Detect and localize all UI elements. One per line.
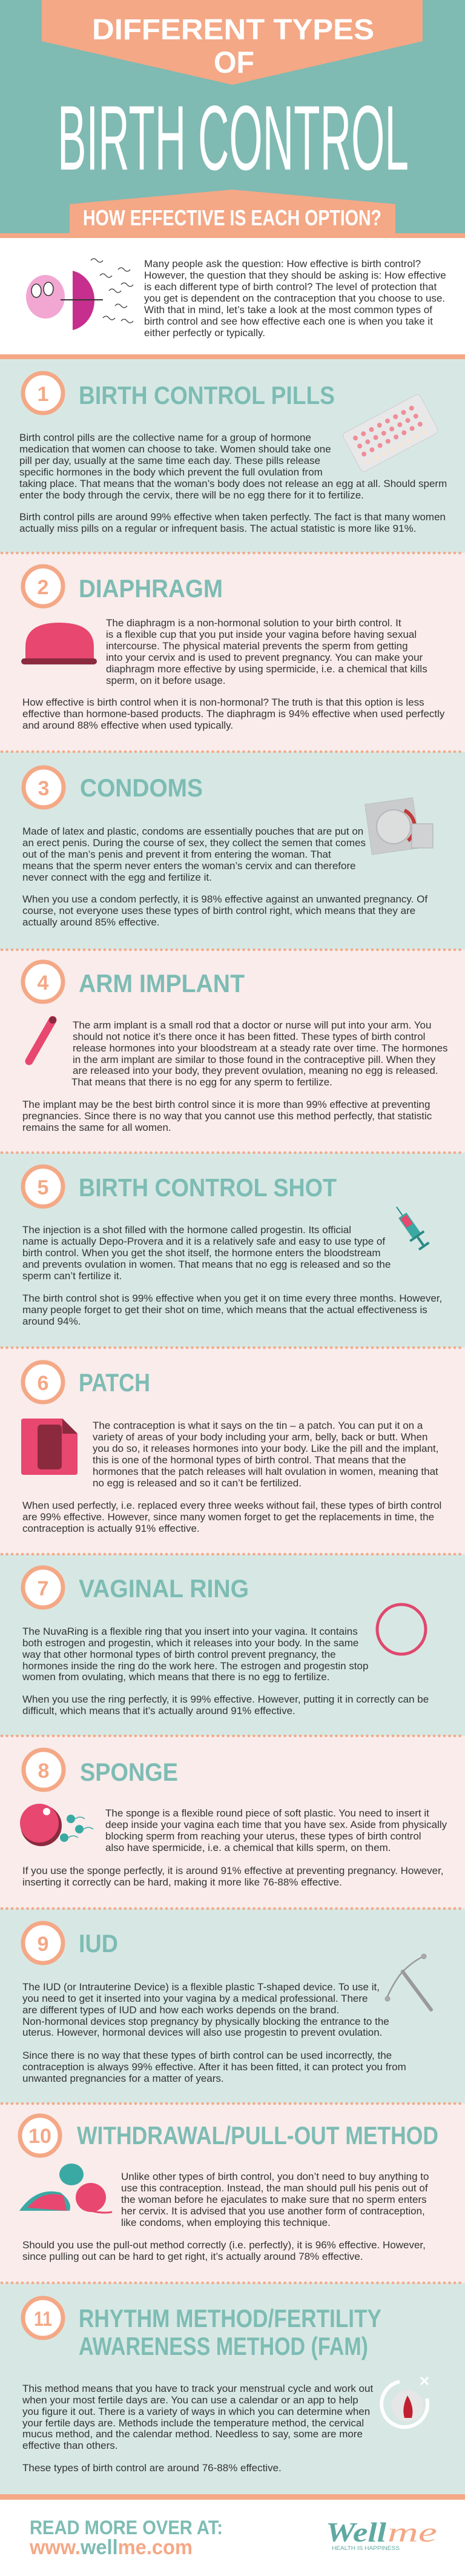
text: The contraception is what it says on the tin – a patch. You can put it on a <box>93 1420 423 1431</box>
text: contraception is actually 91% effective. <box>22 1523 200 1534</box>
text: sperm, on it before usage. <box>106 675 226 686</box>
panel 9: IUD <box>0 1909 465 2104</box>
text: name is actually Depo-Provera and it is a relatively safe and easy to use type of <box>22 1236 385 1247</box>
text: use this contraception. Instead, the man should pull his penis out of <box>121 2182 428 2194</box>
text: you do so, it releases hormones into your body. Like the pill and the implant, <box>93 1443 438 1454</box>
panel 5: birth control shot <box>0 1153 465 1348</box>
icon: ring <box>377 1604 426 1654</box>
number badge 1 <box>23 373 63 413</box>
number badge 5: 5 <box>38 1176 48 1199</box>
text: release hormones into your bloodstream at a steady rate over time. The hormones <box>73 1042 448 1054</box>
intro text: either perfectly or typically. <box>144 327 265 339</box>
icon: pill pack <box>342 393 439 473</box>
text: When you use the ring perfectly, it is 99% effective. However, putting it in correctly can be <box>22 1694 429 1705</box>
text: diaphragm more effective by using spermicide, i.e. a chemical that kills <box>106 663 427 675</box>
number badge 7 <box>23 1568 63 1608</box>
panel 1: birth control pills <box>0 359 465 553</box>
number badge 4 <box>23 962 63 1002</box>
intro text: With that in mind, let’s take a look at the most common types of <box>144 304 432 316</box>
text: birth control. When you get the shot itself, the hormone enters the bloodstream <box>22 1247 381 1259</box>
text: difficult, which means that it’s actually around 91% effective. <box>22 1705 295 1717</box>
text: sperm can’t fertilize it. <box>22 1270 122 1282</box>
text: These types of birth control are around 76-88% effective. <box>22 2462 282 2474</box>
text: Birth control pills are around 99% effective when taken perfectly. The fact is that many women <box>19 511 446 523</box>
text <box>22 1420 441 1534</box>
heading: RHYTHM METHOD/FERTILITY <box>79 2304 381 2333</box>
text: Made of latex and plastic, condoms are essentially pouches that are put on <box>22 826 363 837</box>
text: means that the sperm never enters the woman’s cervix and can therefore <box>22 860 356 872</box>
text: The arm implant is a small rod that a doctor or nurse will put into your arm. You <box>73 1019 431 1031</box>
text: The NuvaRing is a flexible ring that you insert into your vagina. It contains <box>22 1626 358 1637</box>
number badge 2: 2 <box>38 576 48 599</box>
text: no egg is released and so it can’t be fertilized. <box>93 1477 302 1489</box>
text <box>22 617 445 731</box>
text: around 94%. <box>22 1316 81 1327</box>
text: effective than hormone-based products. The diaphragm is 94% effective when used perfectly <box>22 708 445 720</box>
text: This method means that you have to track your menstrual cycle and work out <box>22 2383 373 2394</box>
number badge 9 <box>23 1923 63 1963</box>
text: an erect penis. During the course of sex, they collect the semen that comes <box>22 837 366 849</box>
number badge 11: 11 <box>34 2308 52 2331</box>
text: blocking sperm from reaching your uterus, these types of birth control <box>105 1830 421 1842</box>
icon: couple illustration <box>19 2164 112 2213</box>
text: The diaphragm is a non-hormonal solution to your birth control. It <box>106 617 401 629</box>
number badge 2 <box>23 566 63 606</box>
text: The sponge is a flexible round piece of soft plastic. You need to insert it <box>105 1807 429 1819</box>
text <box>22 1019 448 1133</box>
heading: PATCH <box>79 1368 150 1397</box>
heading: IUD <box>79 1929 118 1958</box>
text: mucus method, and the calendar method. Needless to say, some are more <box>22 2428 363 2440</box>
text: The injection is a shot filled with the hormone called progestin. Its official <box>22 1224 351 1236</box>
text <box>22 1981 406 2084</box>
text: Birth control pills are the collective name for a group of hormone <box>19 432 311 443</box>
text: are released into your body, they prevent ovulation, meaning no egg is released. <box>73 1065 438 1076</box>
text: remains the same for all women. <box>22 1122 171 1133</box>
panel 6: patch <box>0 1348 465 1554</box>
subtitle banner <box>0 190 465 238</box>
text: If you use the sponge perfectly, it is around 91% effective at preventing pregnancy. However, <box>22 1865 444 1876</box>
text <box>22 826 427 928</box>
icon: egg with umbrella <box>26 259 133 330</box>
text: out of the man’s penis and prevent it from entering the woman. That <box>22 849 331 860</box>
text: Unlike other types of birth control, you don’t need to buy anything to <box>121 2171 429 2182</box>
icon: syringe <box>389 1202 432 1252</box>
text: pregnancies. Since there is no way that you cannot use this method perfectly, that statistic <box>22 1110 432 1122</box>
header top banner: DIFFERENT TYPES <box>92 14 374 46</box>
text: when your most fertile days are. You can use a calendar or an app to help <box>22 2394 358 2406</box>
text: you need to get it inserted into your vagina by a medical professional. There <box>22 1993 368 2004</box>
text: course, not everyone uses these types of birth control right, which means that they are <box>22 905 415 916</box>
number badge 10 <box>20 2116 60 2156</box>
text: many people forget to get their shot on time, which means that the actual effectiveness is <box>22 1304 427 1316</box>
logo: me <box>388 2517 437 2548</box>
panel 7: vaginal ring <box>0 1554 465 1736</box>
heading: DIAPHRAGM <box>79 574 223 603</box>
logo: Well <box>326 2517 386 2548</box>
intro text: Many people ask the question: How effective is birth control? <box>144 258 421 270</box>
number badge 10: 10 <box>28 2125 51 2148</box>
text: should not notice it’s there once it has been fitted. These types of birth control <box>73 1031 425 1042</box>
panel 2: diaphragm <box>0 553 465 752</box>
header top banner <box>42 0 423 85</box>
text <box>22 2171 429 2262</box>
text: That means that there is no egg for any sperm to fertilize. <box>71 1076 332 1088</box>
icon: condom packet <box>365 798 433 855</box>
footer url: www.wellme.com <box>29 2536 193 2559</box>
number badge 6: 6 <box>38 1372 48 1395</box>
text: you figure it out. There is a variety of ways in which you can determine when <box>22 2406 370 2417</box>
text: Since there is no way that these types of birth control can be used incorrectly, the <box>22 2050 392 2061</box>
icon: implant rod <box>29 1016 56 1061</box>
text: also have spermicide, i.e. a chemical that kills sperm, on them. <box>105 1842 391 1853</box>
number badge 7: 7 <box>38 1577 48 1600</box>
text: deep inside your vagina each time that you have sex. Aside from physically <box>105 1819 447 1830</box>
footer call to action: READ MORE OVER AT: <box>30 2517 223 2538</box>
main title: BIRTH CONTROL <box>58 86 409 189</box>
text: inserting it correctly can be hard, making it more like 76-88% effective. <box>22 1876 342 1888</box>
text: actually around 85% effective. <box>22 916 160 928</box>
text: are different types of IUD and how each works depends on the brand. <box>22 2004 339 2016</box>
panel 8: sponge <box>0 1736 465 1909</box>
text: variety of areas of your body including your arm, belly, back or butt. When <box>93 1431 427 1443</box>
text: contraception is always 99% effective. After it has been fitted, it can protect you from <box>22 2061 406 2073</box>
text <box>22 1224 442 1327</box>
text: like condoms, when employing this technique. <box>121 2217 331 2228</box>
number badge 5 <box>23 1167 63 1207</box>
number badge 8 <box>24 1750 64 1790</box>
heading: CONDOMS <box>80 773 203 802</box>
logo: HEALTH IS HAPPINESS <box>332 2545 400 2551</box>
header background <box>0 0 465 233</box>
text: enter the body through the cervix, there will be no egg there for it to fertilize. <box>19 489 364 501</box>
number badge 4: 4 <box>38 972 49 995</box>
text: women from ovulating, which means that there is no egg to fertilize. <box>22 1671 329 1683</box>
text: and around 88% effective when used typically. <box>22 720 233 731</box>
text: this is one of the hormonal types of birth control. That means that the <box>93 1454 406 1466</box>
footer <box>0 2500 465 2576</box>
number badge 9: 9 <box>38 1933 48 1956</box>
icon: cycle with drop <box>381 2377 428 2427</box>
intro text: is each different type of birth control? The level of protection that <box>144 281 437 293</box>
text: the woman before he ejaculates to make sure that no sperm enters <box>121 2194 427 2205</box>
subtitle banner: HOW EFFECTIVE IS EACH OPTION? <box>83 205 381 230</box>
text: never connect with the egg and fertilize it. <box>22 872 212 883</box>
heading: VAGINAL RING <box>79 1574 249 1603</box>
text <box>22 2383 373 2474</box>
text <box>22 1626 429 1717</box>
text: is a flexible cup that you put inside your vagina before having sexual <box>106 629 417 640</box>
icon: diaphragm cup <box>21 623 97 664</box>
text: your fertile days are. Methods include the temperature method, the cervical <box>22 2417 364 2429</box>
text: hormones inside the ring do the work here. The estrogen and progestin stop <box>22 1660 368 1672</box>
text <box>19 432 447 534</box>
panel 10: withdrawal <box>0 2104 465 2283</box>
heading: ARM IMPLANT <box>79 969 245 998</box>
text: way that other hormonal types of birth control prevent pregnancy, the <box>22 1649 336 1660</box>
intro panel <box>0 238 465 354</box>
text: When you use a condom perfectly, it is 98% effective against an unwanted pregnancy. Of <box>22 893 427 905</box>
number badge 8: 8 <box>38 1760 49 1783</box>
panel 4: arm implant <box>0 950 465 1153</box>
text: both estrogen and progestin, which it releases into your body. In the same <box>22 1637 358 1649</box>
heading: BIRTH CONTROL PILLS <box>79 381 335 409</box>
text: The IUD (or Intrauterine Device) is a flexible plastic T-shaped device. To use it, <box>22 1981 380 1993</box>
number badge 11 <box>23 2298 63 2338</box>
text: into your cervix and is used to prevent pregnancy. You can make your <box>106 652 423 663</box>
text: and prevents ovulation in women. That means that no egg is released and so the <box>22 1259 391 1270</box>
text: hormones that the patch releases will halt ovulation in women, meaning that <box>93 1466 438 1477</box>
intro text: you get is dependent on the contraception that you choose to use. <box>144 293 445 304</box>
text: actually miss pills on a regular or infrequent basis. The actual statistic is more like 91%. <box>19 523 416 534</box>
heading <box>79 2304 381 2360</box>
text: specific hormones in the body which prevent the full ovulation from <box>19 466 323 478</box>
text: Should you use the pull-out method correctly (i.e. perfectly), it is 96% effective. However, <box>22 2239 426 2251</box>
heading: BIRTH CONTROL SHOT <box>79 1173 337 1202</box>
dotted separators <box>2 553 465 2283</box>
number badge 1: 1 <box>38 383 48 406</box>
intro text: However, the question that they should be asking is: How effective <box>144 270 446 281</box>
text: in the arm implant are similar to those found in the contraceptive pill. When they <box>73 1054 436 1065</box>
text: pill per day, usually at the same time each day. These pills release <box>19 455 320 466</box>
icon: egg and sperm <box>20 1804 93 1846</box>
text: The implant may be the best birth control since it is more than 99% effective at preventing <box>22 1099 430 1110</box>
header top banner: OF <box>214 45 254 79</box>
text: Non-hormonal devices stop pregnancy by physically blocking the entrance to the <box>22 2016 389 2027</box>
intro text <box>144 258 446 339</box>
text: uterus. However, hormonal devices will also use progestin to prevent ovulation. <box>22 2027 382 2038</box>
text <box>22 1807 447 1888</box>
logo <box>326 2517 437 2551</box>
number badge 3 <box>24 767 64 807</box>
icon: patch <box>21 1419 78 1475</box>
text: When used perfectly, i.e. replaced every three weeks without fail, these types of birth control <box>22 1500 441 1511</box>
intro text: birth control and see how effective each one is when you take it <box>144 316 433 327</box>
text: taking place. That means that the woman’s body does not release an egg at all. Should sperm <box>19 478 447 489</box>
text: are 99% effective. However, since many women forget to get the replacements in time, the <box>22 1511 434 1523</box>
number badge 3: 3 <box>38 777 49 800</box>
text: medication that women can choose to take. Women should take one <box>19 443 331 455</box>
text: How effective is birth control when it is non-hormonal? The truth is that this option is less <box>22 697 424 708</box>
text: The birth control shot is 99% effective when you get it on time every three months. However, <box>22 1293 442 1304</box>
text: her cervix. It is advised that you use another form of contraception, <box>121 2205 425 2217</box>
text: unwanted pregnancies for a matter of years. <box>22 2073 224 2084</box>
panel 3: condoms <box>0 752 465 950</box>
icon: IUD device <box>385 1954 431 2010</box>
heading: SPONGE <box>80 1758 178 1786</box>
number badge 6 <box>23 1362 63 1402</box>
panel 11: rhythm method <box>0 2283 465 2494</box>
text: since pulling out can be hard to get right, it’s actually around 78% effective. <box>22 2251 363 2262</box>
text: intercourse. The physical material prevents the sperm from getting <box>106 640 408 652</box>
heading: AWARENESS METHOD (FAM) <box>79 2332 368 2360</box>
text: effective than others. <box>22 2440 118 2451</box>
